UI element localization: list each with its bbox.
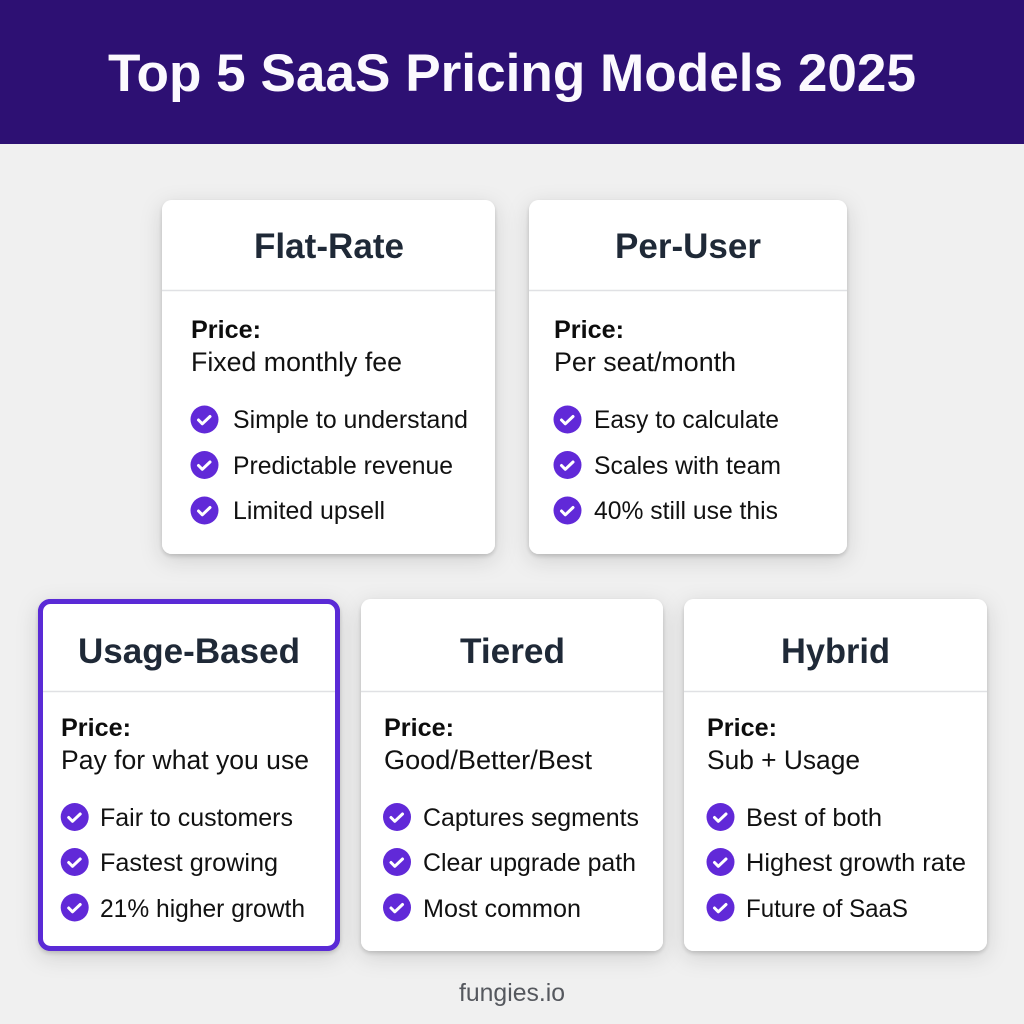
- icon: check: [554, 451, 582, 479]
- item: Limited upsell: [233, 497, 385, 525]
- panel: Tiered: [361, 599, 663, 951]
- header banner: [0, 0, 1024, 144]
- item: Most common: [423, 895, 581, 923]
- price description: Fixed monthly fee: [191, 347, 402, 377]
- item: Best of both: [746, 804, 882, 832]
- icon: check: [190, 496, 218, 524]
- icon: check: [190, 451, 218, 479]
- price description: Pay for what you use: [61, 745, 309, 775]
- icon: check: [706, 848, 734, 876]
- item: Scales with team: [594, 452, 781, 480]
- heading: Hybrid: Hybrid: [781, 632, 890, 671]
- icon: check: [190, 406, 218, 434]
- price description: Per seat/month: [554, 347, 736, 377]
- panel: Flat-Rate: [162, 200, 495, 554]
- price description: Good/Better/Best: [384, 745, 593, 775]
- icon: check: [383, 803, 411, 831]
- item: Easy to calculate: [594, 406, 779, 434]
- icon: check: [383, 848, 411, 876]
- price description: Sub + Usage: [707, 745, 860, 775]
- icon: check: [554, 496, 582, 524]
- item: Predictable revenue: [233, 452, 453, 480]
- icon: check: [61, 894, 89, 922]
- panel: Per-User: [529, 200, 847, 554]
- icon: check: [383, 894, 411, 922]
- item: Fastest growing: [100, 849, 278, 877]
- icon: check: [554, 406, 582, 434]
- icon: check: [61, 803, 89, 831]
- heading: Tiered: Tiered: [460, 632, 565, 671]
- item: Simple to understand: [233, 406, 468, 434]
- price label: Price:: [384, 714, 454, 742]
- price label: Price:: [61, 714, 131, 742]
- title: Top 5 SaaS Pricing Models 2025: [108, 44, 916, 103]
- price label: Price:: [707, 714, 777, 742]
- item: Fair to customers: [100, 804, 293, 832]
- heading: Per-User: Per-User: [615, 227, 761, 266]
- item: 40% still use this: [594, 497, 778, 525]
- item: 21% higher growth: [100, 895, 305, 923]
- icon: check: [706, 803, 734, 831]
- heading: Usage-Based: Usage-Based: [78, 632, 300, 671]
- icon: check: [706, 894, 734, 922]
- icon: check: [61, 848, 89, 876]
- price label: Price:: [191, 316, 261, 344]
- footer: brand: fungies.io: [459, 979, 565, 1007]
- panel: Usage-Based (highlighted): [40, 602, 338, 948]
- panel: Hybrid: [684, 599, 987, 951]
- heading: Flat-Rate: Flat-Rate: [254, 227, 404, 266]
- item: Clear upgrade path: [423, 849, 636, 877]
- item: Highest growth rate: [746, 849, 966, 877]
- item: Future of SaaS: [746, 895, 908, 923]
- item: Captures segments: [423, 804, 639, 832]
- price label: Price:: [554, 316, 624, 344]
